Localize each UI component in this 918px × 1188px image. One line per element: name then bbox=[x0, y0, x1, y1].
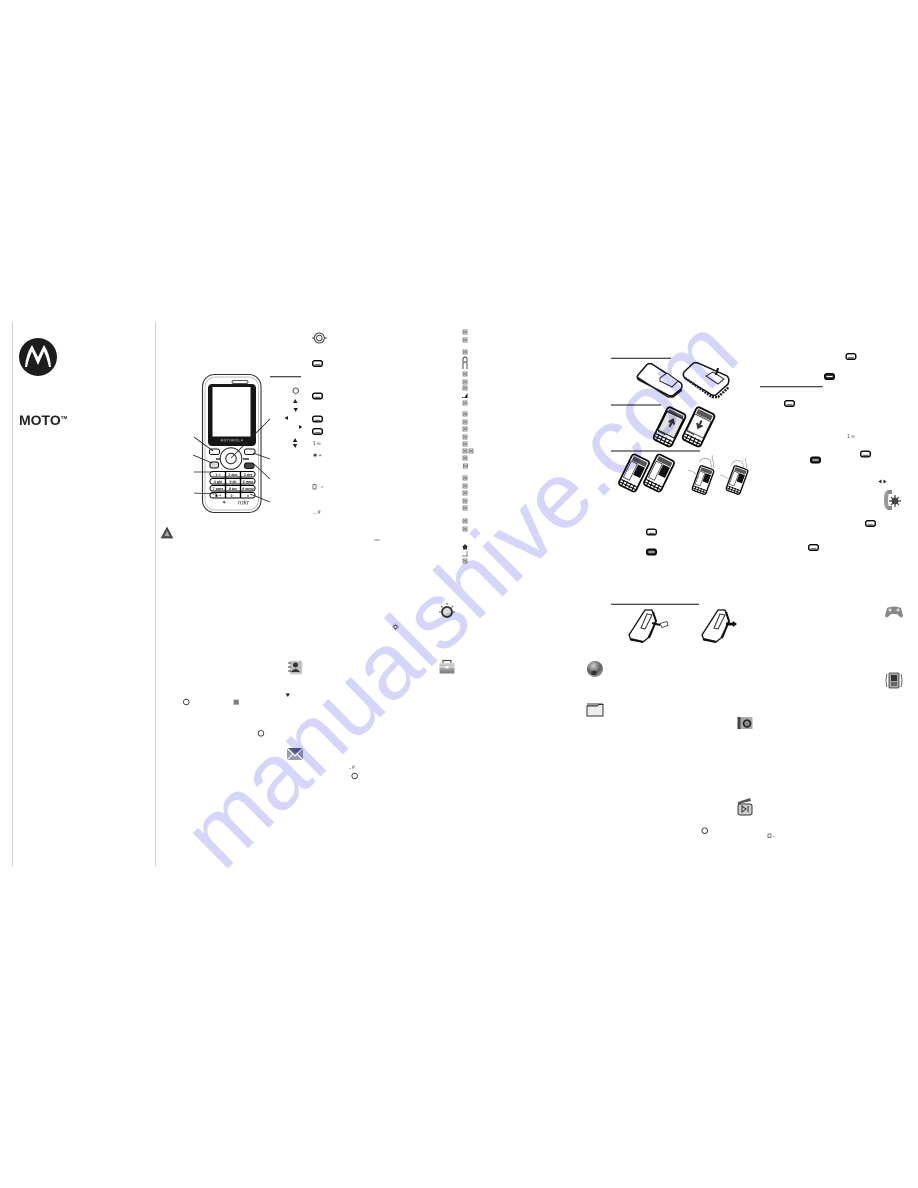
icon: right column key A bbox=[846, 354, 856, 359]
heading rule: cover bbox=[611, 357, 671, 359]
icon: vibrating phone bbox=[886, 673, 902, 688]
icon: soft key left bbox=[313, 416, 322, 422]
icon: left right arrows bbox=[878, 480, 886, 484]
illustration: cover removed bbox=[637, 364, 682, 397]
illustration: cover attached bbox=[683, 363, 729, 397]
illustration: memory card insert bbox=[629, 610, 668, 642]
Motorola logo bbox=[19, 338, 57, 376]
right soft key bbox=[244, 449, 255, 454]
illustration: SIM 2 bbox=[643, 454, 675, 492]
keypad labels: 8 tuv bbox=[229, 487, 237, 491]
illustration: battery seated bbox=[682, 406, 715, 447]
keypad labels: 2 abc bbox=[228, 473, 238, 477]
icon: games controller bbox=[885, 606, 903, 618]
illustration: battery insert bbox=[653, 406, 686, 447]
heading rule: phone keys bbox=[270, 376, 301, 378]
keypad labels bbox=[213, 473, 254, 498]
icon: hash key: →# bbox=[312, 510, 322, 516]
icon: select circle 3 bbox=[352, 773, 358, 779]
navigation centre bbox=[226, 453, 236, 464]
heading rule: battery bbox=[611, 404, 661, 406]
icon: tools briefcase bbox=[440, 660, 454, 674]
navigation ring bbox=[220, 448, 242, 469]
icon: web globe bbox=[587, 661, 603, 677]
side bars bbox=[216, 458, 249, 460]
keypad labels: 3 def bbox=[244, 473, 253, 477]
icon: mini contacts bbox=[234, 700, 239, 705]
icon: contacts bbox=[288, 661, 302, 674]
phone body bbox=[202, 374, 261, 512]
icon: send key bbox=[313, 393, 322, 399]
icon: navigation key bbox=[312, 333, 327, 343]
icon: right column dark key E bbox=[811, 457, 820, 463]
icon: key bbox=[647, 529, 656, 535]
icon: key 1: 1 ∞ bbox=[313, 441, 321, 447]
model mark: rokr bbox=[238, 500, 250, 506]
keypad labels: 5 jkl bbox=[230, 480, 236, 484]
status icons column bbox=[462, 330, 473, 563]
icon: star key: ✱ + bbox=[313, 453, 322, 459]
icon: hash glyph: →# bbox=[347, 765, 355, 771]
icon: right column dark key B bbox=[825, 374, 834, 379]
icon: dark key bbox=[647, 549, 656, 555]
icon: right column key F bbox=[866, 521, 875, 526]
panel dividers bbox=[12, 322, 156, 866]
keypad labels: 1 ∞ bbox=[215, 473, 221, 477]
icon: camera bbox=[738, 717, 752, 729]
icon: phone settings bbox=[884, 490, 901, 510]
icon: right column key G bbox=[809, 545, 818, 550]
keypad bbox=[210, 472, 255, 498]
illustration: SIM 3 with callouts bbox=[688, 455, 714, 495]
watermark: manualshive.com bbox=[163, 298, 757, 887]
icon: folder bbox=[587, 703, 603, 716]
bezel brand: MOTOROLA bbox=[221, 438, 244, 442]
keypad labels: ✱ + bbox=[215, 494, 221, 498]
left soft key bbox=[210, 449, 220, 454]
icon: select circle 2 bbox=[258, 730, 264, 736]
key icons column bbox=[312, 333, 380, 540]
end key bbox=[244, 463, 254, 468]
phone front illustration bbox=[202, 374, 261, 512]
icon: menu key bbox=[313, 361, 322, 366]
keypad labels: 0 _ bbox=[230, 494, 236, 498]
icon: right column key C bbox=[785, 401, 794, 406]
keypad labels: 9 wxyz bbox=[242, 487, 254, 491]
screen bezel bbox=[208, 384, 256, 446]
earpiece bbox=[232, 380, 248, 384]
icon: settings sun bbox=[439, 603, 455, 617]
icon: right column key D bbox=[861, 451, 870, 457]
icon: select circle 4 bbox=[702, 828, 708, 834]
illustration: SIM 4 with callouts bbox=[720, 458, 748, 495]
product title: TM bbox=[61, 415, 67, 420]
navigation symbols legend bbox=[284, 388, 302, 448]
bottom mark bbox=[222, 502, 226, 504]
keypad labels: 4 ghi bbox=[214, 480, 222, 484]
screen bbox=[212, 387, 250, 436]
warning icon bbox=[161, 528, 173, 538]
heading rule: SIM bbox=[611, 450, 700, 452]
icon: digit glyph: 1 ∞ bbox=[847, 434, 855, 440]
icon: small triangle bbox=[286, 694, 290, 697]
send key bbox=[210, 462, 218, 468]
icon: small sun bbox=[392, 624, 399, 630]
keypad labels: # bbox=[247, 494, 249, 498]
icon: small key glyph bbox=[768, 834, 774, 838]
icon: soft key right bbox=[313, 429, 322, 434]
icon: video clapper bbox=[738, 798, 752, 815]
heading rule: memory card bbox=[611, 603, 699, 605]
icon: zero key bbox=[313, 484, 323, 489]
arrow glyph bbox=[374, 539, 380, 541]
heading rule: end key section bbox=[760, 386, 823, 388]
icon: messages bbox=[287, 748, 303, 760]
illustration: charger connect bbox=[702, 610, 737, 642]
keypad labels: 7 pqrs bbox=[213, 487, 223, 491]
icon: select circle bbox=[184, 699, 189, 705]
product title: MOTO bbox=[19, 412, 61, 428]
callout lines bbox=[193, 419, 270, 502]
phone inner edge bbox=[205, 377, 258, 510]
illustration: SIM 1 bbox=[618, 454, 650, 492]
keypad labels: 6 mno bbox=[243, 480, 254, 484]
